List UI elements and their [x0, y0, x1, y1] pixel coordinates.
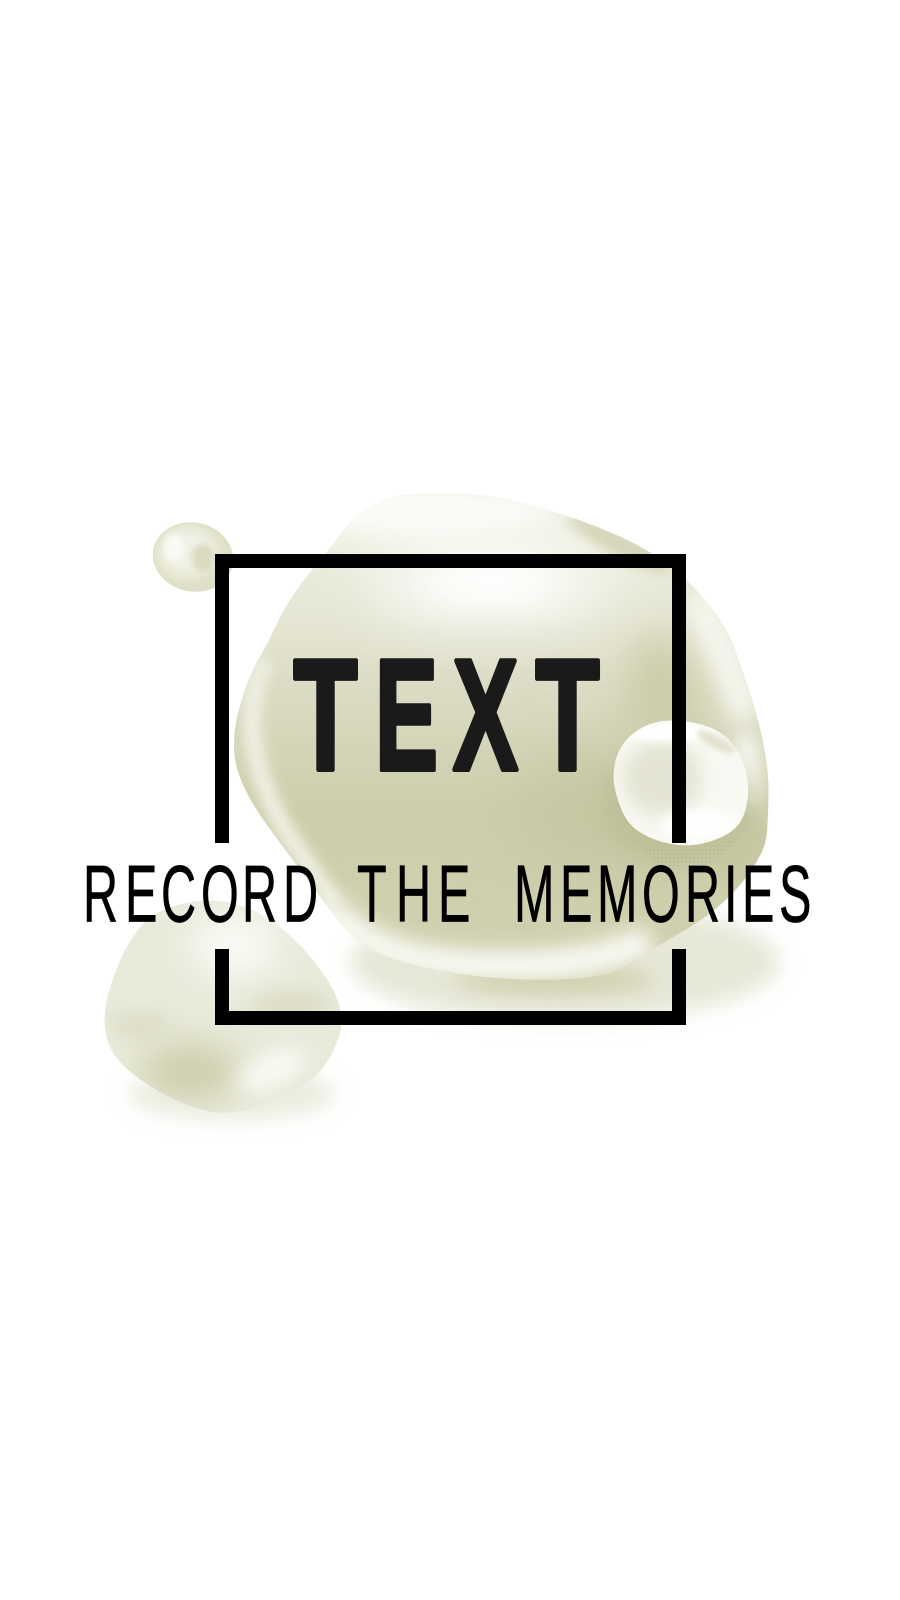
- drop shadow under lower-left blob: [128, 1068, 336, 1120]
- heading: TEXT: T: [536, 628, 600, 804]
- heading: TEXT: E: [375, 628, 438, 804]
- square frame with gap: [222, 561, 679, 1018]
- large pearl blob: [220, 480, 780, 990]
- water droplet: [614, 720, 748, 846]
- drop shadow under large blob: [350, 902, 780, 1022]
- lower-left pearl blob: [100, 895, 345, 1120]
- heading: TEXT: T: [294, 628, 358, 804]
- contact shadow of water droplet: [603, 743, 751, 868]
- infographic canvas: [86, 493, 810, 1126]
- heading: TEXT: X: [453, 628, 518, 804]
- subtitle: RECORD THE MEMORIES: RECORD THE MEMORIES: [83, 850, 811, 940]
- small pearl: [152, 522, 233, 592]
